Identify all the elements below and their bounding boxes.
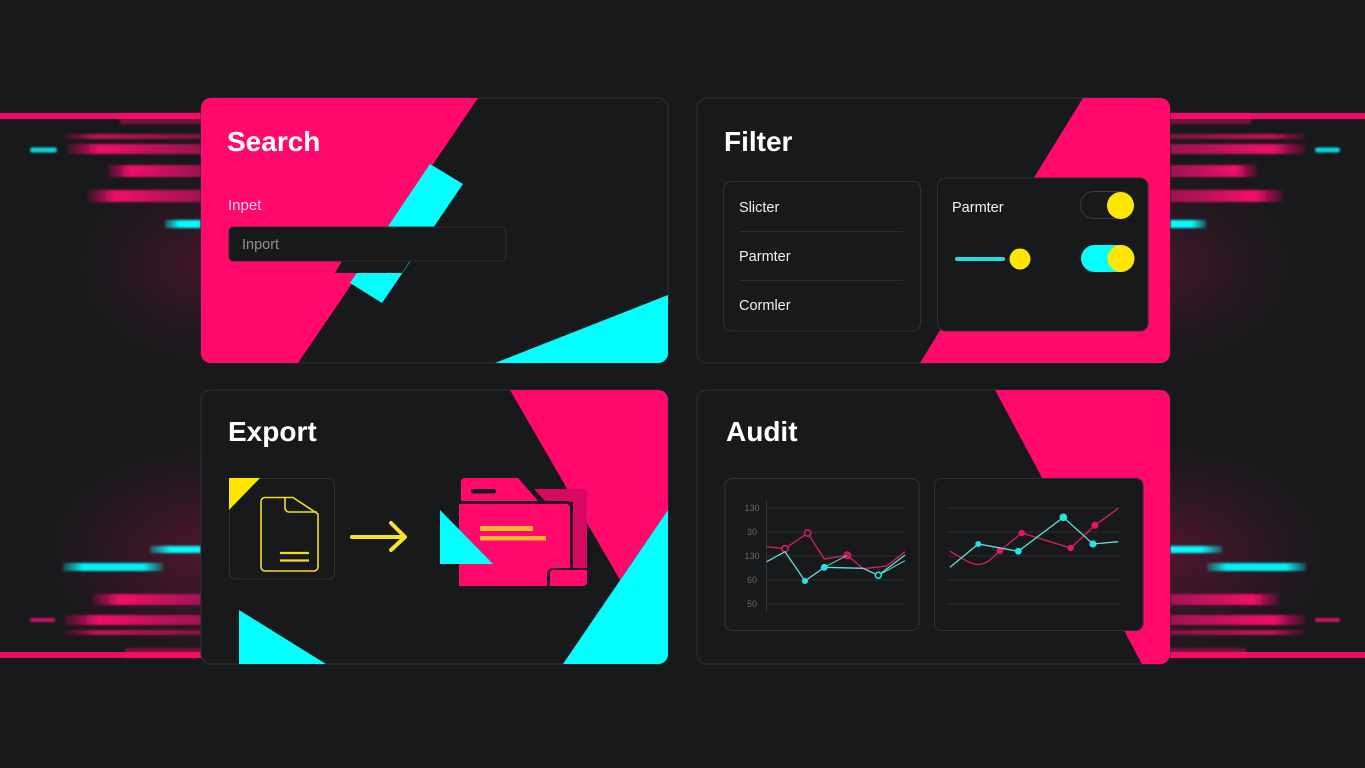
- icon: folder: [440, 478, 587, 586]
- audit pink shape: [995, 390, 1170, 664]
- slider: [955, 248, 1030, 270]
- y axis labels: 30: [747, 527, 757, 537]
- heading: search: Search: [227, 126, 320, 157]
- parameter list: Slicter: [739, 200, 779, 216]
- y axis labels: [744, 503, 760, 609]
- toggle off: [1080, 192, 1134, 219]
- cyan series: [767, 552, 905, 584]
- input field: [229, 227, 506, 261]
- pink series: [767, 530, 905, 569]
- parameter list: Cormler: [739, 298, 791, 314]
- document card: [229, 478, 334, 579]
- left light streaks: [0, 113, 201, 658]
- y axis labels: 130: [744, 503, 760, 513]
- left line chart: [725, 478, 919, 630]
- cyan series: [950, 514, 1118, 567]
- panel: export: [201, 390, 668, 664]
- heading: filter: Filter: [724, 126, 793, 157]
- y axis labels: 130: [744, 551, 760, 561]
- panel: audit: [697, 390, 1170, 664]
- heading: export: Export: [228, 416, 317, 447]
- right light streaks: [1170, 113, 1365, 658]
- panel: filter: [697, 98, 1170, 363]
- y axis labels: 60: [747, 575, 757, 585]
- pink series: [950, 508, 1118, 564]
- parameter list: Parmter: [739, 249, 791, 265]
- heading: audit: Audit: [726, 416, 798, 447]
- right line chart: [934, 478, 1143, 630]
- toggle on: [1081, 245, 1134, 272]
- panel: search: [201, 98, 668, 363]
- filter pink shape: [920, 98, 1170, 363]
- arrow: [352, 523, 405, 550]
- controls panel: [938, 178, 1148, 331]
- red ambient glows: [45, 165, 1330, 665]
- controls panel: Parmter: [952, 200, 1004, 216]
- input label: Inpet: [228, 197, 262, 214]
- y axis labels: 50: [747, 599, 757, 609]
- search panel shapes: [201, 98, 668, 363]
- parameter list: [724, 182, 920, 331]
- icon: document: [261, 498, 318, 571]
- input field: Inport: [242, 237, 279, 253]
- export background shapes: [239, 390, 668, 664]
